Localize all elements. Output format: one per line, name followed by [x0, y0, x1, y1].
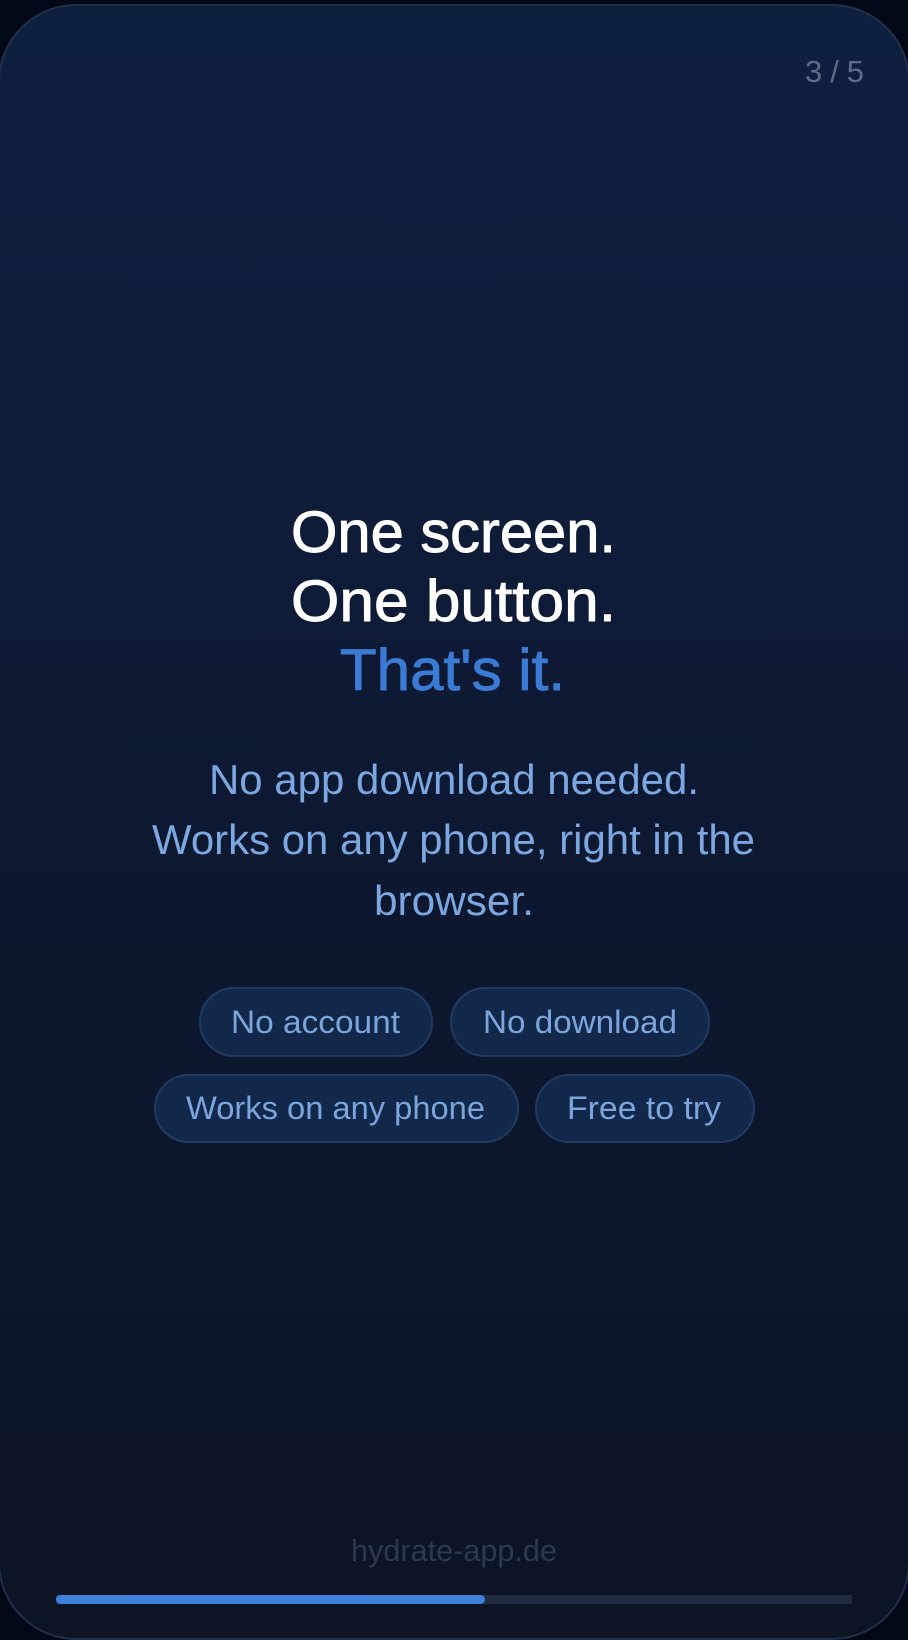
- subheading text: No app download needed.: [209, 756, 699, 803]
- pill: Free to try: [536, 1075, 754, 1142]
- headline: That's it.: [340, 638, 565, 703]
- pill: No download: No download: [483, 1004, 677, 1040]
- headline: One screen.: [291, 500, 616, 565]
- pill: No download: [451, 988, 709, 1056]
- subheading text: [152, 756, 755, 924]
- subheading text: Works on any phone, right in the: [152, 816, 755, 863]
- pill: No account: No account: [231, 1004, 400, 1040]
- pill: Free to try: Free to try: [567, 1090, 721, 1126]
- pill: Works on any phone: [155, 1075, 518, 1142]
- subheading text: browser.: [374, 877, 534, 924]
- progress bar: [56, 1595, 852, 1604]
- slide counter: 3 / 5: [805, 54, 864, 89]
- headline: [291, 500, 616, 703]
- website url: hydrate-app.de: [351, 1533, 557, 1568]
- pill: Works on any phone: Works on any phone: [186, 1090, 485, 1126]
- pill: No account: [200, 988, 432, 1056]
- headline: One button.: [291, 569, 616, 634]
